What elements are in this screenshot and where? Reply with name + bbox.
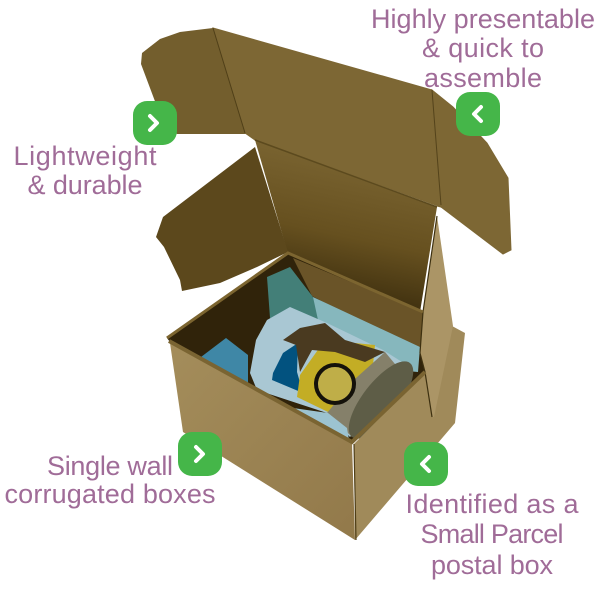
right lid flap [432,90,511,254]
mug with cyclist print [250,307,424,448]
inner back panel [293,258,423,353]
label line 3: postal box [431,550,554,580]
box rim [167,253,423,338]
label: Highly presentable [371,4,595,34]
front box face [170,343,355,540]
right upright flap [420,216,453,417]
crease: right flap [432,90,441,205]
callout: small parcel postal box [404,442,579,580]
label line 2: & quick to [422,33,544,63]
label: Lightweight [14,141,157,171]
print: yellow ground [297,340,375,412]
corner seam [354,444,356,540]
label line 3: assemble [424,63,542,93]
print: grey band [327,352,400,437]
print: blue sky [272,343,303,393]
main lid panel [213,28,441,207]
label: Single wall [47,451,173,481]
badge arrow left [456,92,500,136]
callout: single wall corrugated [4,432,222,509]
label line 2: corrugated boxes [4,479,216,509]
blue tissue paper [201,267,420,385]
print: wheel [316,365,354,403]
left lid flap [141,28,253,137]
fold line: upright flap [420,216,437,417]
badge arrow right [178,432,222,476]
callout: highly presentable [371,4,595,136]
label: Identified as a [406,489,579,519]
callout: lightweight and durable [14,101,177,200]
crease: left flap [213,28,245,133]
right box face [354,326,465,540]
cardboard box illustration [141,28,511,540]
left inner flap [156,147,288,291]
label line 2: Small Parcel [420,519,564,549]
lower tissue [293,408,349,440]
print: cyclist [283,323,385,372]
mug base [338,352,424,448]
badge arrow right [133,101,177,145]
label line 2: & durable [28,170,142,200]
badge arrow left [404,442,448,486]
interior [167,253,425,440]
box rim front [169,341,425,442]
crease: lid fold [255,140,437,207]
back wall of box [255,140,437,312]
